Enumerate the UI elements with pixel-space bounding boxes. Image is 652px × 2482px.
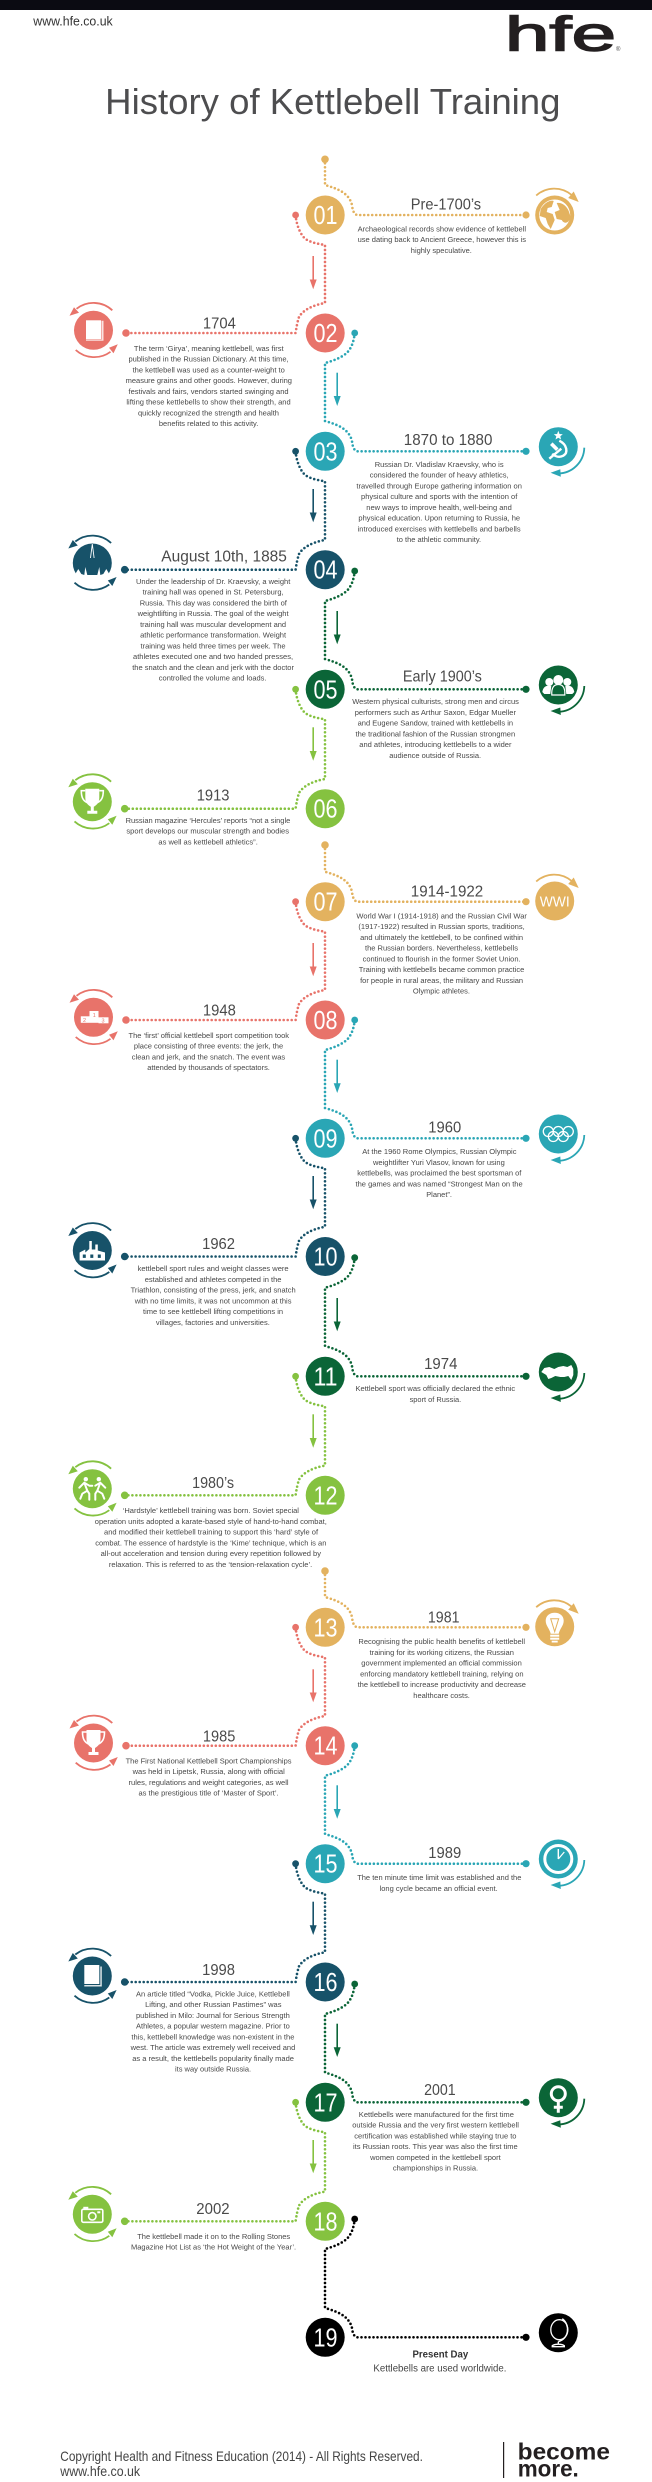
description: championships in Russia. <box>393 2164 478 2172</box>
description: weightlifter Yuri Vlasov, known for using <box>372 1158 505 1167</box>
connector <box>325 2216 530 2341</box>
description: the games and was named “Strongest Man on the <box>356 1179 523 1188</box>
description <box>130 1990 295 2074</box>
number badge <box>306 1726 345 1765</box>
description: physical education. Upon returning to Russia, he <box>358 514 520 522</box>
description: Archaeological records show evidence of kettlebell <box>358 224 526 234</box>
description: its way outside Russia. <box>175 2065 251 2074</box>
connector <box>122 212 325 337</box>
footer copyright: www.hfe.co.uk <box>59 2463 141 2479</box>
connector <box>325 1981 530 2106</box>
number badge: 07 <box>314 887 338 917</box>
description: its Russian roots. This year was also the first time <box>353 2142 518 2151</box>
description: published in the Russian Dictionary. At this time, <box>128 354 289 364</box>
connector <box>122 1624 325 1749</box>
heading: 1985 <box>203 1729 235 1746</box>
arrow <box>310 1176 317 1209</box>
description: was held in Lipetsk, Russia, along with official <box>132 1767 285 1776</box>
description: Kettlebells were manufactured for the first time <box>359 2110 514 2119</box>
description: Russia. This day was considered the birth of <box>140 598 288 607</box>
description: the kettlebell was used as a counter-weight to <box>133 365 285 374</box>
description: attended by thousands of spectators. <box>147 1063 270 1072</box>
description: travelled through Europe gathering information on <box>356 481 522 490</box>
icon: WWI <box>535 875 579 920</box>
description <box>356 1384 515 1404</box>
connector <box>121 1135 325 1260</box>
description: festivals and fairs, vendors started swinging and <box>128 387 289 396</box>
hfe logo: ® <box>616 46 621 53</box>
description: Lifting, and other Russian Pastimes” was <box>145 2000 282 2009</box>
step 02: 1704 <box>70 212 345 428</box>
step 17: 2001 <box>306 1981 584 2172</box>
heading: August 10th, 1885 <box>161 549 287 566</box>
icon: runners <box>68 1461 117 1516</box>
arrow <box>334 1785 341 1819</box>
description: introduced exercises with kettlebells and barbells <box>358 524 521 533</box>
heading: 1981 <box>428 1609 460 1626</box>
description: highly speculative. <box>411 246 472 255</box>
become more logo: become <box>518 2438 610 2464</box>
description: government implemented an official commission <box>361 1659 522 1668</box>
description: continued to flourish in the former Soviet Union. <box>363 954 521 964</box>
become more logo: more. <box>518 2456 579 2482</box>
description: lifting these kettlebells to show their strength, and <box>126 398 291 407</box>
number badge: 01 <box>314 200 338 230</box>
description: weightlifting in Russia. The goal of the weight <box>137 609 289 618</box>
become more logo <box>503 2438 610 2482</box>
icon: book <box>70 303 118 357</box>
description <box>357 1873 521 1893</box>
step 01: Pre-1700's <box>306 156 579 255</box>
description: combat. The essence of hardstyle is the ‘Kime’ technique, which is an <box>95 1538 326 1547</box>
arrow <box>334 1298 341 1331</box>
heading: 1870 to 1880 <box>404 432 492 449</box>
description: training was held three times per week. The <box>140 641 286 650</box>
heading: Present Day <box>412 2349 469 2360</box>
connector <box>325 1017 530 1142</box>
description: athletes executed one and two handed presses, <box>133 652 293 661</box>
description: long cycle became an official event. <box>380 1884 498 1893</box>
description: the traditional fashion of the Russian strongmen <box>356 729 515 738</box>
number badge <box>306 550 345 589</box>
step 05: Early 1900's <box>306 568 584 760</box>
connector <box>121 2099 325 2225</box>
icon: podium <box>70 990 118 1044</box>
description <box>132 577 294 682</box>
step 04: August 10th, 1885 <box>68 448 345 682</box>
icon: podium: 3 <box>102 1018 105 1024</box>
arrow <box>310 1669 317 1702</box>
description: Olympic athletes. <box>413 987 470 996</box>
description: At the 1960 Rome Olympics, Russian Olympic <box>362 1147 517 1156</box>
description: use dating back to Ancient Greece, however this is <box>358 235 526 244</box>
description: this, kettlebell knowledge was non-existent in the <box>131 2032 294 2042</box>
icon: group of people <box>539 666 584 715</box>
number badge <box>306 1119 345 1158</box>
heading: 2002 <box>196 2201 230 2218</box>
step 10: 1962 <box>68 1135 345 1327</box>
step 12: 1980's <box>68 1373 345 1569</box>
icon: trophy <box>68 774 117 829</box>
description: relaxation. This is referred to as the ‘tension-relaxation cycle’. <box>109 1560 312 1569</box>
number badge: 02 <box>314 318 338 348</box>
number badge <box>306 1476 345 1515</box>
number badge: 14 <box>314 1731 338 1761</box>
description: performers such as Arthur Saxon, Edgar Mueller <box>355 708 516 717</box>
description: for people in rural areas, the military and Russian <box>360 976 523 985</box>
arrow <box>310 727 317 761</box>
number badge <box>306 1357 345 1396</box>
number badge: 06 <box>314 794 338 824</box>
description: Western physical culturists, strong men and circus <box>352 697 519 706</box>
description: Athletes, a popular western magazine. Prior to <box>136 2022 290 2031</box>
description: published in Milo: Journal for Serious Strength <box>136 2011 290 2020</box>
description <box>356 912 527 996</box>
heading: Pre-1700’s <box>411 196 481 213</box>
number badge <box>306 1000 345 1040</box>
description: benefits related to this activity. <box>159 419 258 428</box>
description <box>352 2110 519 2172</box>
description: An article titled “Vodka, Pickle Juice, Kettlebell <box>136 1990 290 1998</box>
description: and modified their kettlebell training to support this ‘hard’ style of <box>104 1528 319 1537</box>
number badge: 18 <box>314 2206 338 2236</box>
heading: 1913 <box>197 788 230 805</box>
number badge: 19 <box>314 2322 338 2352</box>
connector <box>121 448 325 574</box>
description: to the athletic community. <box>397 535 481 544</box>
icon: WWI: WWI <box>540 894 570 910</box>
step 06: 1913 <box>68 686 345 846</box>
number badge: 08 <box>314 1005 338 1035</box>
connector <box>325 330 530 455</box>
number badge <box>306 196 345 234</box>
description: Russian Dr. Vladislav Kraevsky, who is <box>375 460 504 469</box>
heading: 2001 <box>424 2082 456 2099</box>
description: Recognising the public health benefits of kettlebell <box>358 1637 525 1646</box>
description: Training with kettlebells became common practice <box>359 965 524 974</box>
step 18: 2002 <box>68 2099 345 2252</box>
description: training hall was muscular development and <box>140 620 286 629</box>
description: The First National Kettlebell Sport Championships <box>126 1756 292 1766</box>
description: healthcare costs. <box>413 1691 470 1700</box>
connector <box>325 1742 530 1867</box>
arrow <box>310 1414 317 1448</box>
number badge <box>306 789 345 828</box>
number badge: 09 <box>314 1123 338 1153</box>
step 09: 1960 <box>306 1017 584 1199</box>
connector <box>325 568 530 693</box>
connector <box>121 1373 325 1499</box>
description: quickly recognized the strength and health <box>138 408 279 417</box>
number badge <box>306 314 345 352</box>
description: outside Russia and the very first western kettlebell <box>352 2120 519 2130</box>
number badge: 10 <box>314 1242 338 1272</box>
description <box>95 1506 327 1569</box>
description: west. The article was extremely well received and <box>130 2043 295 2052</box>
step 16: 1998 <box>68 1860 345 2074</box>
description: women competed in the kettlebell sport <box>369 2153 502 2162</box>
step 14: 1985 <box>70 1624 345 1798</box>
description <box>356 460 522 544</box>
connector <box>321 156 530 219</box>
icon: factory <box>68 1223 117 1277</box>
description: sport develops our muscular strength and bodies <box>126 826 289 836</box>
description: as a result, the kettlebells popularity finally made <box>132 2054 294 2063</box>
footer copyright: Copyright Health and Fitness Education (2014) - All Rights Reserved. <box>60 2448 423 2464</box>
description: clean and jerk, and the snatch. The event was <box>132 1052 285 1061</box>
number badge <box>306 1844 345 1883</box>
arrow <box>334 2024 341 2057</box>
description: all-out acceleration and tension during every repetition followed by <box>101 1549 321 1558</box>
description: kettlebells, was proclaimed the best sportsman of <box>357 1169 522 1178</box>
icon: podium: 1 <box>93 1013 96 1019</box>
description: audience outside of Russia. <box>389 751 481 760</box>
number badge <box>306 432 345 471</box>
description: The term ‘Girya’, meaning kettlebell, was first <box>134 344 284 353</box>
description: and athletes, introducing kettlebells to a wider <box>359 740 512 749</box>
description: measure grains and other goods. However, during <box>126 376 292 385</box>
description: training for its working citizens, the Russian <box>370 1648 514 1657</box>
description <box>358 1637 526 1700</box>
icon: desk globe <box>539 2313 578 2352</box>
number badge: 17 <box>314 2087 338 2117</box>
heading: 1989 <box>428 1845 461 1862</box>
description: controlled the volume and loads. <box>159 674 266 682</box>
description: as the prestigious title of ‘Master of Sport’. <box>138 1789 279 1798</box>
icon: timer <box>539 1840 584 1889</box>
number badge: 15 <box>314 1849 338 1879</box>
description: with no time limits, it was not uncommon at this <box>134 1296 292 1305</box>
connector <box>121 1860 325 1986</box>
description <box>126 1756 292 1798</box>
number badge: 16 <box>314 1967 338 1997</box>
heading: 1704 <box>203 315 236 332</box>
arrow <box>310 943 317 976</box>
icon: Olympic rings <box>539 1114 584 1164</box>
header bar <box>0 0 652 10</box>
icon: Kremlin skyline <box>68 536 117 590</box>
description: Under the leadership of Dr. Kraevsky, a weight <box>136 577 291 586</box>
description <box>126 816 290 846</box>
icon: magazine <box>68 1949 117 2003</box>
icon: trophy <box>70 1716 118 1770</box>
arrow <box>334 373 341 406</box>
hfe logo: hfe <box>505 9 616 62</box>
heading: 1980’s <box>192 1475 234 1492</box>
number badge <box>306 1608 345 1647</box>
heading: Early 1900’s <box>403 669 482 686</box>
arrow <box>310 1902 317 1935</box>
heading: 1962 <box>202 1236 235 1253</box>
step 13: 1981 <box>306 1567 579 1700</box>
connector <box>321 1567 530 1631</box>
heading: 1960 <box>428 1119 461 1136</box>
description: athletic performance transformation. Weight <box>140 630 287 640</box>
description: Russian magazine ‘Hercules’ reports “not a single <box>126 816 290 825</box>
icon: podium: 2 <box>83 1018 86 1024</box>
description <box>356 1147 523 1199</box>
description: kettlebell sport rules and weight classes were <box>138 1264 289 1273</box>
description: the kettlebell to increase productivity and decrease <box>358 1680 526 1689</box>
description: operation units adopted a karate-based style of hand-to-hand combat, <box>95 1517 327 1526</box>
description: training hall was opened in St. Petersburg, <box>143 588 284 596</box>
connector <box>321 841 530 905</box>
number badge: 12 <box>314 1480 338 1510</box>
step 11: 1974 <box>306 1254 584 1404</box>
description: time to see kettlebell lifting competitions in <box>143 1307 283 1316</box>
description: enforcing mandatory kettlebell training, relying on <box>360 1669 524 1678</box>
arrow <box>310 2140 317 2173</box>
website address: www.hfe.co.uk <box>32 14 113 28</box>
description: new ways to improve health, well-being and <box>366 503 512 512</box>
number badge: 03 <box>314 436 338 466</box>
description: place consisting of three events: the jerk, the <box>134 1042 283 1050</box>
arrow <box>334 611 341 644</box>
description <box>358 224 526 255</box>
icon: light bulb <box>535 1600 579 1646</box>
description: The ‘first’ official kettlebell sport competition took <box>128 1031 289 1040</box>
hfe logo <box>505 9 621 62</box>
description: physical culture and sports with the intention of <box>361 492 518 501</box>
heading: 1914-1922 <box>411 884 483 901</box>
number badge <box>306 1237 345 1276</box>
heading: 1974 <box>424 1356 457 1373</box>
description: as well as kettlebell athletics”. <box>158 838 258 846</box>
heading: 1998 <box>202 1962 235 1979</box>
description: established and athletes competed in the <box>145 1275 282 1284</box>
icon: hammer and sickle <box>539 427 584 477</box>
number badge <box>306 2318 345 2357</box>
step 19: Present Day <box>306 2216 578 2374</box>
connector <box>122 898 325 1024</box>
description: The ten minute time limit was established and the <box>357 1873 521 1882</box>
description: the Russian borders. Nevertheless, kettlebells <box>365 944 518 953</box>
title: History of Kettlebell Training <box>105 81 560 122</box>
arrow <box>310 489 317 522</box>
footer copyright <box>59 2448 423 2479</box>
description <box>128 1031 289 1072</box>
description: (1917-1922) resulted in Russian sports, traditions, <box>358 922 525 931</box>
number badge: 05 <box>314 674 338 704</box>
description: villages, factories and universities. <box>156 1318 270 1327</box>
number badge <box>306 670 345 709</box>
description: ‘Hardstyle’ kettlebell training was born. Soviet special <box>123 1506 299 1515</box>
description: Kettlebells are used worldwide. <box>373 2363 506 2374</box>
number badge: 11 <box>314 1361 338 1391</box>
icon: globe <box>535 189 579 234</box>
description: rules, regulations and weight categories, as well <box>128 1778 289 1787</box>
description <box>131 2232 296 2252</box>
number badge: 04 <box>314 555 338 585</box>
step 03: 1870 to 1880 <box>306 330 584 544</box>
arrow <box>310 256 317 289</box>
icon: female symbol <box>539 2078 584 2128</box>
description <box>131 1264 296 1327</box>
step 07: 1914-1922 <box>306 841 579 996</box>
description: and ultimately the kettlebell, to be confined within <box>360 933 523 942</box>
step 08: 1948 <box>70 898 345 1072</box>
step 15: 1989 <box>306 1742 584 1893</box>
number badge <box>306 1962 345 2002</box>
description: considered the founder of heavy athletics, <box>370 470 509 480</box>
arrow <box>334 1060 341 1093</box>
description: Magazine Hot List as ‘the Hot Weight of the Year’. <box>131 2243 296 2252</box>
description: World War I (1914-1918) and the Russian Civil War <box>356 912 527 920</box>
description: Planet”. <box>426 1190 452 1199</box>
heading: 1948 <box>203 1003 236 1020</box>
connector <box>121 686 325 812</box>
description: The kettlebell made it on to the Rolling Stones <box>137 2232 290 2241</box>
number badge: 13 <box>314 1612 338 1642</box>
number badge <box>306 2083 345 2122</box>
icon: camera <box>68 2187 117 2241</box>
number badge <box>306 882 345 921</box>
description <box>126 344 292 428</box>
icon: map of Russia <box>539 1352 584 1402</box>
description: Kettlebell sport was officially declared the ethnic <box>356 1384 515 1393</box>
description: the snatch and the clean and jerk with the doctor <box>132 663 294 672</box>
description: certification was established while staying true to <box>354 2131 516 2140</box>
number badge <box>306 2202 345 2241</box>
connector <box>325 1254 530 1380</box>
description: and Eugene Sandow, trained with kettlebells in <box>358 719 513 728</box>
description: sport of Russia. <box>410 1395 461 1404</box>
description: Triathlon, consisting of the press, jerk, and snatch <box>131 1286 296 1295</box>
description <box>352 697 519 760</box>
